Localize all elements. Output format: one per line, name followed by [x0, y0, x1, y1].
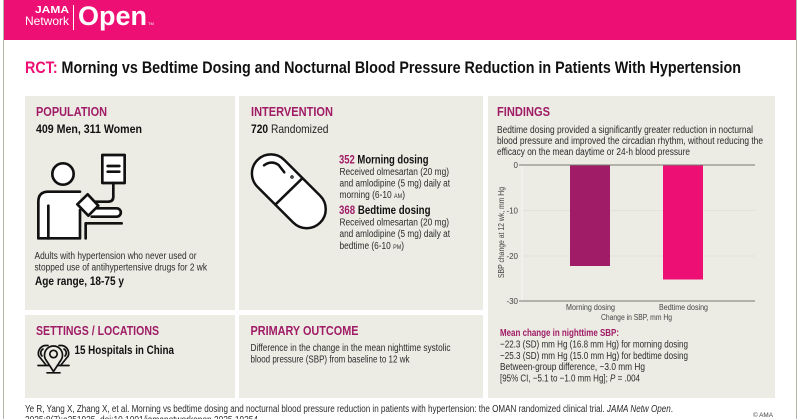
bedtime dosing group: and amlodipine (5 mg) daily at — [340, 229, 450, 240]
population description — [34, 251, 208, 274]
citation: Ye R, Yang X, Zhang X, et al. Morning vs bedtime dosing and nocturnal blood pressure reduction in patients with hypertension: the OMAN randomized clinical trial. JAMA Netw Open. — [25, 404, 673, 415]
panel: settings and locations — [25, 315, 235, 398]
bar: morning dosing — [570, 165, 610, 266]
morning dosing group: morning (6-10 AM) — [340, 190, 405, 201]
randomized count: 720 Randomized — [251, 122, 328, 136]
copyright: © AMA — [753, 411, 774, 419]
header band with logo: Network — [25, 14, 70, 28]
mean change results: [95% CI, −5.1 to −1.0 mm Hg]; P = .004 — [500, 374, 640, 384]
icon: capsule — [244, 147, 334, 236]
mean change results — [500, 328, 688, 384]
heading: population: POPULATION — [36, 104, 107, 119]
panel: primary outcome — [239, 315, 483, 398]
header band with logo: TM — [148, 21, 154, 26]
x-axis category label: morning: Morning dosing — [566, 303, 615, 312]
population counts: 409 Men, 311 Women — [36, 122, 142, 136]
findings summary: efficacy on the mean daytime or 24-h blood pressure — [497, 147, 690, 158]
primary outcome description — [250, 343, 450, 366]
heading: primary outcome: PRIMARY OUTCOME — [250, 323, 359, 338]
citation — [25, 404, 673, 419]
y-axis tick labels: -10 — [506, 206, 519, 216]
morning dosing group: 352 Morning dosing — [339, 154, 428, 166]
panel: findings — [488, 96, 775, 398]
morning dosing group — [339, 154, 450, 201]
icon: patient with blood pressure cuff — [38, 155, 125, 238]
panel: intervention — [239, 96, 483, 310]
x-axis category label: bedtime: Bedtime dosing — [659, 303, 708, 312]
findings summary — [497, 125, 763, 158]
bar: bedtime dosing — [663, 165, 703, 280]
heading: intervention: INTERVENTION — [251, 104, 333, 119]
primary outcome description: Difference in the change in the mean nighttime systolic — [250, 343, 450, 354]
mean change results: −22.3 (SD) mm Hg (16.8 mm Hg) for morning dosing — [500, 340, 688, 350]
primary outcome description: blood pressure (SBP) from baseline to 12 wk — [250, 354, 410, 366]
y-axis title: SBP change at 12 wk, mm Hg — [497, 187, 506, 278]
bedtime dosing group: 368 Bedtime dosing — [339, 205, 430, 217]
population description: stopped use of antihypertensive drugs for 2 wk — [34, 262, 208, 274]
findings summary: Bedtime dosing provided a significantly greater reduction in nocturnal — [497, 125, 753, 136]
x-axis title: Change in SBP, mm Hg — [601, 313, 672, 322]
mean change results: Between-group difference, −3.0 mm Hg — [500, 362, 645, 373]
header band with logo: Open — [78, 1, 147, 31]
bedtime dosing group: bedtime (6-10 PM) — [340, 241, 404, 252]
age range: Age range, 18-75 y — [35, 274, 124, 288]
y-axis tick labels: -30 — [506, 297, 519, 306]
y-axis tick labels — [506, 161, 519, 306]
panel: population — [25, 96, 235, 310]
heading: findings: FINDINGS — [497, 104, 550, 119]
morning dosing group: Received olmesartan (20 mg) — [340, 167, 449, 178]
bar chart: SBP change at 12 weeks — [497, 161, 755, 322]
y-axis tick labels: 0 — [514, 161, 519, 170]
population description: Adults with hypertension who never used or — [34, 251, 197, 262]
hospitals text: 15 Hospitals in China — [74, 343, 174, 357]
y-axis tick labels: -20 — [506, 252, 519, 261]
header band with logo — [4, 0, 796, 40]
header band with logo: JAMA — [35, 4, 69, 16]
bedtime dosing group: Received olmesartan (20 mg) — [340, 218, 449, 228]
morning dosing group: and amlodipine (5 mg) daily at — [340, 178, 450, 190]
mean change results: Mean change in nighttime SBP: — [500, 328, 619, 339]
icon: map pins — [38, 346, 69, 373]
heading: settings: SETTINGS / LOCATIONS — [36, 323, 159, 338]
bedtime dosing group — [339, 205, 450, 252]
mean change results: −25.3 (SD) mm Hg (15.0 mm Hg) for bedtime dosing — [500, 351, 688, 362]
